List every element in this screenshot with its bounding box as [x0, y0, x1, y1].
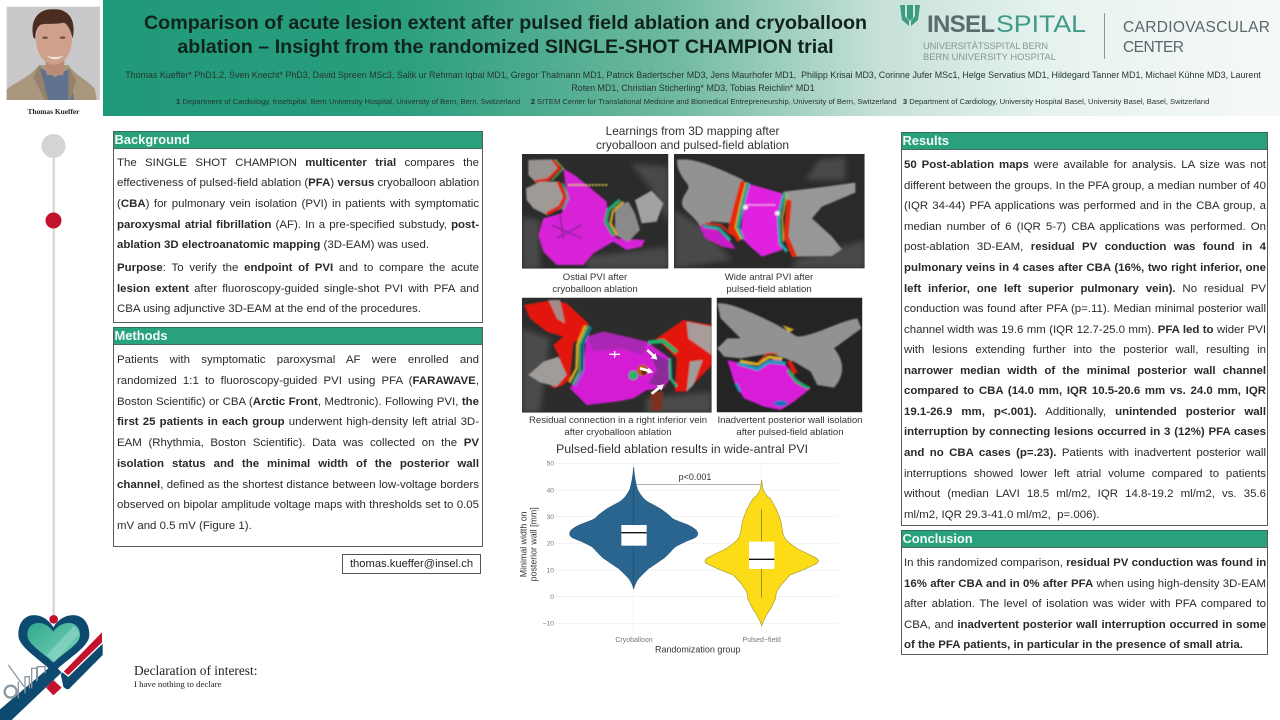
text block: background: The SINGLE SHOT CHAMPION multicenter trial compares the [117, 156, 479, 168]
heading: background: Background [114, 132, 190, 147]
text block: results: without (median LAVI 18.5 ml/m2, IQR 14.8-19.2 ml/m2, vs. 35.6 [904, 488, 1266, 500]
text block: results: 50 Post-ablation maps were available for analysis. LA size was not [904, 158, 1266, 170]
y axis title [519, 507, 539, 581]
image: wide antral PVI after pulsed-field [674, 154, 865, 268]
panel: background [113, 131, 483, 323]
heading: methods [114, 328, 482, 344]
declaration of interest: Declaration of interest: [134, 663, 257, 678]
authors [125, 70, 1261, 93]
text block: conclusion: 16% after CBA and in 0% after PFA when using high-density 3D-EAM [904, 578, 1266, 590]
text block: background [117, 156, 479, 315]
caption: wide antral PVI [724, 272, 814, 295]
text block: results: different between the groups. In the PFA group, a median number of 40 [904, 180, 1266, 192]
image: ostial PVI after cryoballoon [522, 154, 668, 269]
text block: background: (CBA) for pulmonary vein isolation (PVI) in patients with symptomatic [117, 198, 479, 210]
logo: Inselspital and Cardiovascular Center: UNIVERSITÄTSSPITAL BERN [923, 40, 1048, 51]
text block: conclusion: after ablation. The level of isolation was wider with PFA compared to [904, 598, 1266, 610]
text block: conclusion [904, 556, 1266, 650]
caption: residual connection: Residual connection in a right inferior vein [529, 415, 707, 426]
text block: results: compared to CBA (14.0 mm, IQR 10.5-20.6 mm vs. 24.0 mm, IQR [904, 384, 1266, 396]
caption: inadvertent posterior wall isolation [717, 415, 863, 438]
text block: results: left inferior, one left superior pulmonary vein). No residual PV [904, 282, 1266, 294]
text block: background: lesion extent after fluoroscopy-guided single-shot PVI with PFA and [117, 282, 479, 294]
text block: background: ablation 3D electroanatomic mapping (3D-EAM) was used. [117, 239, 429, 251]
text block: methods: observed on bipolar amplitude voltage maps with thresholds set to 0.05 [117, 499, 479, 511]
text block: results: narrower median width of the minimal posterior wall channel [904, 364, 1266, 376]
text block: results: channel width was 19.6 mm (IQR 12.7-25.0 mm). PFA led to wider PVI [904, 324, 1266, 336]
text block: results: interruptions showed lower left atrial volume compared to patients [904, 468, 1266, 480]
text block: background: CBA using adjunctive 3D-EAM at the end of the procedures. [117, 303, 421, 315]
text block: results: ml/m2, IQR 29.3-41.0 ml/m2, p=.006). [904, 508, 1099, 520]
y axis tick labels: 30 [547, 514, 554, 521]
caption: wide antral PVI: pulsed-field ablation [726, 284, 812, 295]
panel: results [901, 132, 1268, 526]
heading: methods: Methods [114, 328, 168, 343]
title [144, 12, 867, 58]
y axis tick labels: 50 [547, 461, 554, 468]
heading: conclusion [902, 531, 1267, 548]
header banner [103, 0, 1280, 116]
heading: results [902, 133, 1267, 150]
title: ablation – Insight from the randomized SINGLE-SHOT CHAMPION trial [177, 36, 834, 58]
text block: results [904, 158, 1266, 520]
text block: methods: Boston Scientific) or CBA (Arctic Front, Medtronic). Following PVI, the [117, 396, 479, 408]
text block: results: median number of 6 (IQR 5-7) CBA applications was performed. On [904, 220, 1266, 232]
3D map images [522, 154, 865, 413]
panel: conclusion [901, 530, 1268, 655]
heading: background [114, 132, 482, 148]
text block: results: 19.1-26.9 mm, p<.001). Additionally, unintended posterior wall [904, 406, 1266, 418]
figure heading: 3D mapping: cryoballoon and pulsed-field ablation [596, 138, 789, 152]
caption: residual connection: after cryoballoon ablation [564, 427, 672, 438]
authors: Thomas Kueffer* PhD1,2, Sven Knecht* PhD3, David Spreen MSc3, Salik ur Rehman Iqbal MD1, Gregor Thalmann MD1, Patrick Badertscher MD3, Jens Maurhofer MD1, Philipp Krisai MD3, Corinne Jufer MSc1, Helge Servatius MD1, Hildegard Tanner MD1, Michael Kühne MD3, Laurent [125, 70, 1261, 80]
text block: methods: channel, defined as the shortest distance between low-voltage borders [117, 478, 479, 490]
figure heading: 3D mapping: Learnings from 3D mapping after [606, 124, 779, 138]
text block: methods: randomized 1:1 to fluoroscopy-guided PVI using PFA (FARAWAVE, [117, 374, 479, 386]
text block: methods: mV and 0.5 mV (Figure 1). [117, 520, 252, 532]
caption: wide antral PVI: Wide antral PVI after [725, 272, 813, 283]
figure heading: 3D mapping [596, 124, 789, 152]
logo: Inselspital and Cardiovascular Center: BERN UNIVERSITY HOSPITAL [923, 51, 1056, 62]
significance bracket: p<0.001 [679, 472, 711, 482]
text block: results: pulmonary veins in 4 cases after CBA (16%, two right inferior, one [904, 262, 1266, 274]
text block: background: effectiveness of pulsed-field ablation (PFA) versus cryoballoon ablation [117, 177, 479, 189]
text block: results: with lesions extending further into the posterior wall, resulting in [904, 344, 1266, 356]
y axis tick labels [543, 461, 554, 628]
caption: ostial PVI [552, 272, 638, 295]
x axis labels [615, 637, 781, 644]
text block: results: and no CBA cases (p=.23). Patients with inadvertent posterior wall [904, 446, 1266, 458]
y axis title: Minimal width on [519, 511, 529, 577]
text block: results: interruption by connecting lesions occurred in 3 (12%) PFA cases [904, 426, 1266, 438]
logo: Inselspital and Cardiovascular Center: CENTER [1123, 39, 1184, 56]
contact email box: thomas.kueffer@insel.ch [350, 558, 473, 570]
text block: conclusion: In this randomized comparison, residual PV conduction was found in [904, 556, 1266, 568]
authors: Roten MD1, Christian Sticherling* MD3, Tobias Reichlin* MD1 [571, 82, 815, 92]
y axis tick labels: 20 [547, 541, 554, 548]
caption: inadvertent posterior wall isolation: after pulsed-field ablation [736, 427, 844, 438]
text block: conclusion: CBA, and inadvertent posterior wall interruption occurred in some [904, 618, 1266, 630]
text block: results: conduction was found after PFA (p=.11). Median minimal posterior wall [904, 302, 1266, 314]
caption: inadvertent posterior wall isolation: Inadvertent posterior wall isolation [717, 415, 863, 426]
image: inadvertent posterior wall isolation [717, 298, 862, 412]
y axis tick labels: 40 [547, 487, 554, 494]
text block: methods: Patients with symptomatic paroxysmal AF were enrolled and [117, 354, 479, 366]
x axis title: Randomization group [655, 645, 740, 655]
arrows pointing at residual connection [609, 350, 664, 394]
image: residual connection after cryoballoon [522, 298, 712, 413]
heading: conclusion: Conclusion [902, 531, 973, 546]
text block: methods: EAM (Rhythmia, Boston Scientific). Data was collected on the PV [117, 437, 479, 449]
logo: Inselspital and Cardiovascular Center: SPITAL [996, 11, 1086, 38]
text block: conclusion: of the PFA patients, in particular in the presence of small atria. [904, 638, 1243, 650]
text block: methods: isolation status and the minimal width of the posterior wall [117, 458, 479, 470]
heading: results: Results [902, 133, 949, 148]
panel: methods [113, 327, 483, 547]
text block: results: (IQR 34-44) PFA applications was performed and in the CBA group, a [904, 200, 1266, 212]
caption: ostial PVI: cryoballoon ablation [552, 284, 638, 295]
text block: methods [117, 354, 479, 532]
text block: methods: first 25 patients in each group underwent high-density left atrial 3D- [117, 416, 479, 428]
text block: background: Purpose: To verify the endpoint of PVI and to compare the acute [117, 262, 479, 274]
caption: residual connection [529, 415, 707, 438]
text block: background: paroxysmal atrial fibrillation (AF). In a pre-specified substudy, post- [117, 218, 479, 230]
declaration of interest [134, 663, 257, 689]
y axis tick labels: −10 [543, 621, 554, 628]
presenter name: Thomas Kueffer [28, 107, 79, 116]
x axis labels: Cryoballoon [615, 637, 653, 644]
y axis tick labels: 0 [550, 594, 554, 601]
affiliations: 1 Department of Cardiology, Inselspital, Bern University Hospital, University of Bern, Bern, Switzerland 2 SITEM Center for Translational Medicine and Biomedical Entrepreneurship, University of Bern, Switzerland 3 Department of Cardiology, University Hospital Basel, University Basel, Basel, Switzerland [176, 97, 1209, 106]
logo: Inselspital and Cardiovascular Center: CARDIOVASCULAR [1123, 19, 1270, 36]
contact email box [342, 554, 481, 574]
declaration of interest: I have nothing to declare [134, 679, 221, 689]
violin: pulsed-field [705, 480, 818, 626]
figure heading: violin plot: Pulsed-field ablation results in wide-antral PVI [556, 442, 808, 456]
y axis title: posterior wall [mm] [529, 507, 539, 581]
significance bracket [636, 472, 762, 485]
caption: ostial PVI: Ostial PVI after [563, 272, 627, 283]
y axis tick labels: 10 [547, 567, 554, 574]
logo: Inselspital and Cardiovascular Center: INSEL [927, 11, 995, 38]
title: Comparison of acute lesion extent after pulsed field ablation and cryoballoon [144, 12, 867, 34]
violin: cryoballoon [570, 467, 698, 589]
text block: results: post-ablation 3D-EAM, residual PV conduction was found in 4 [904, 240, 1266, 252]
x axis labels: Pulsed−field [743, 637, 781, 644]
